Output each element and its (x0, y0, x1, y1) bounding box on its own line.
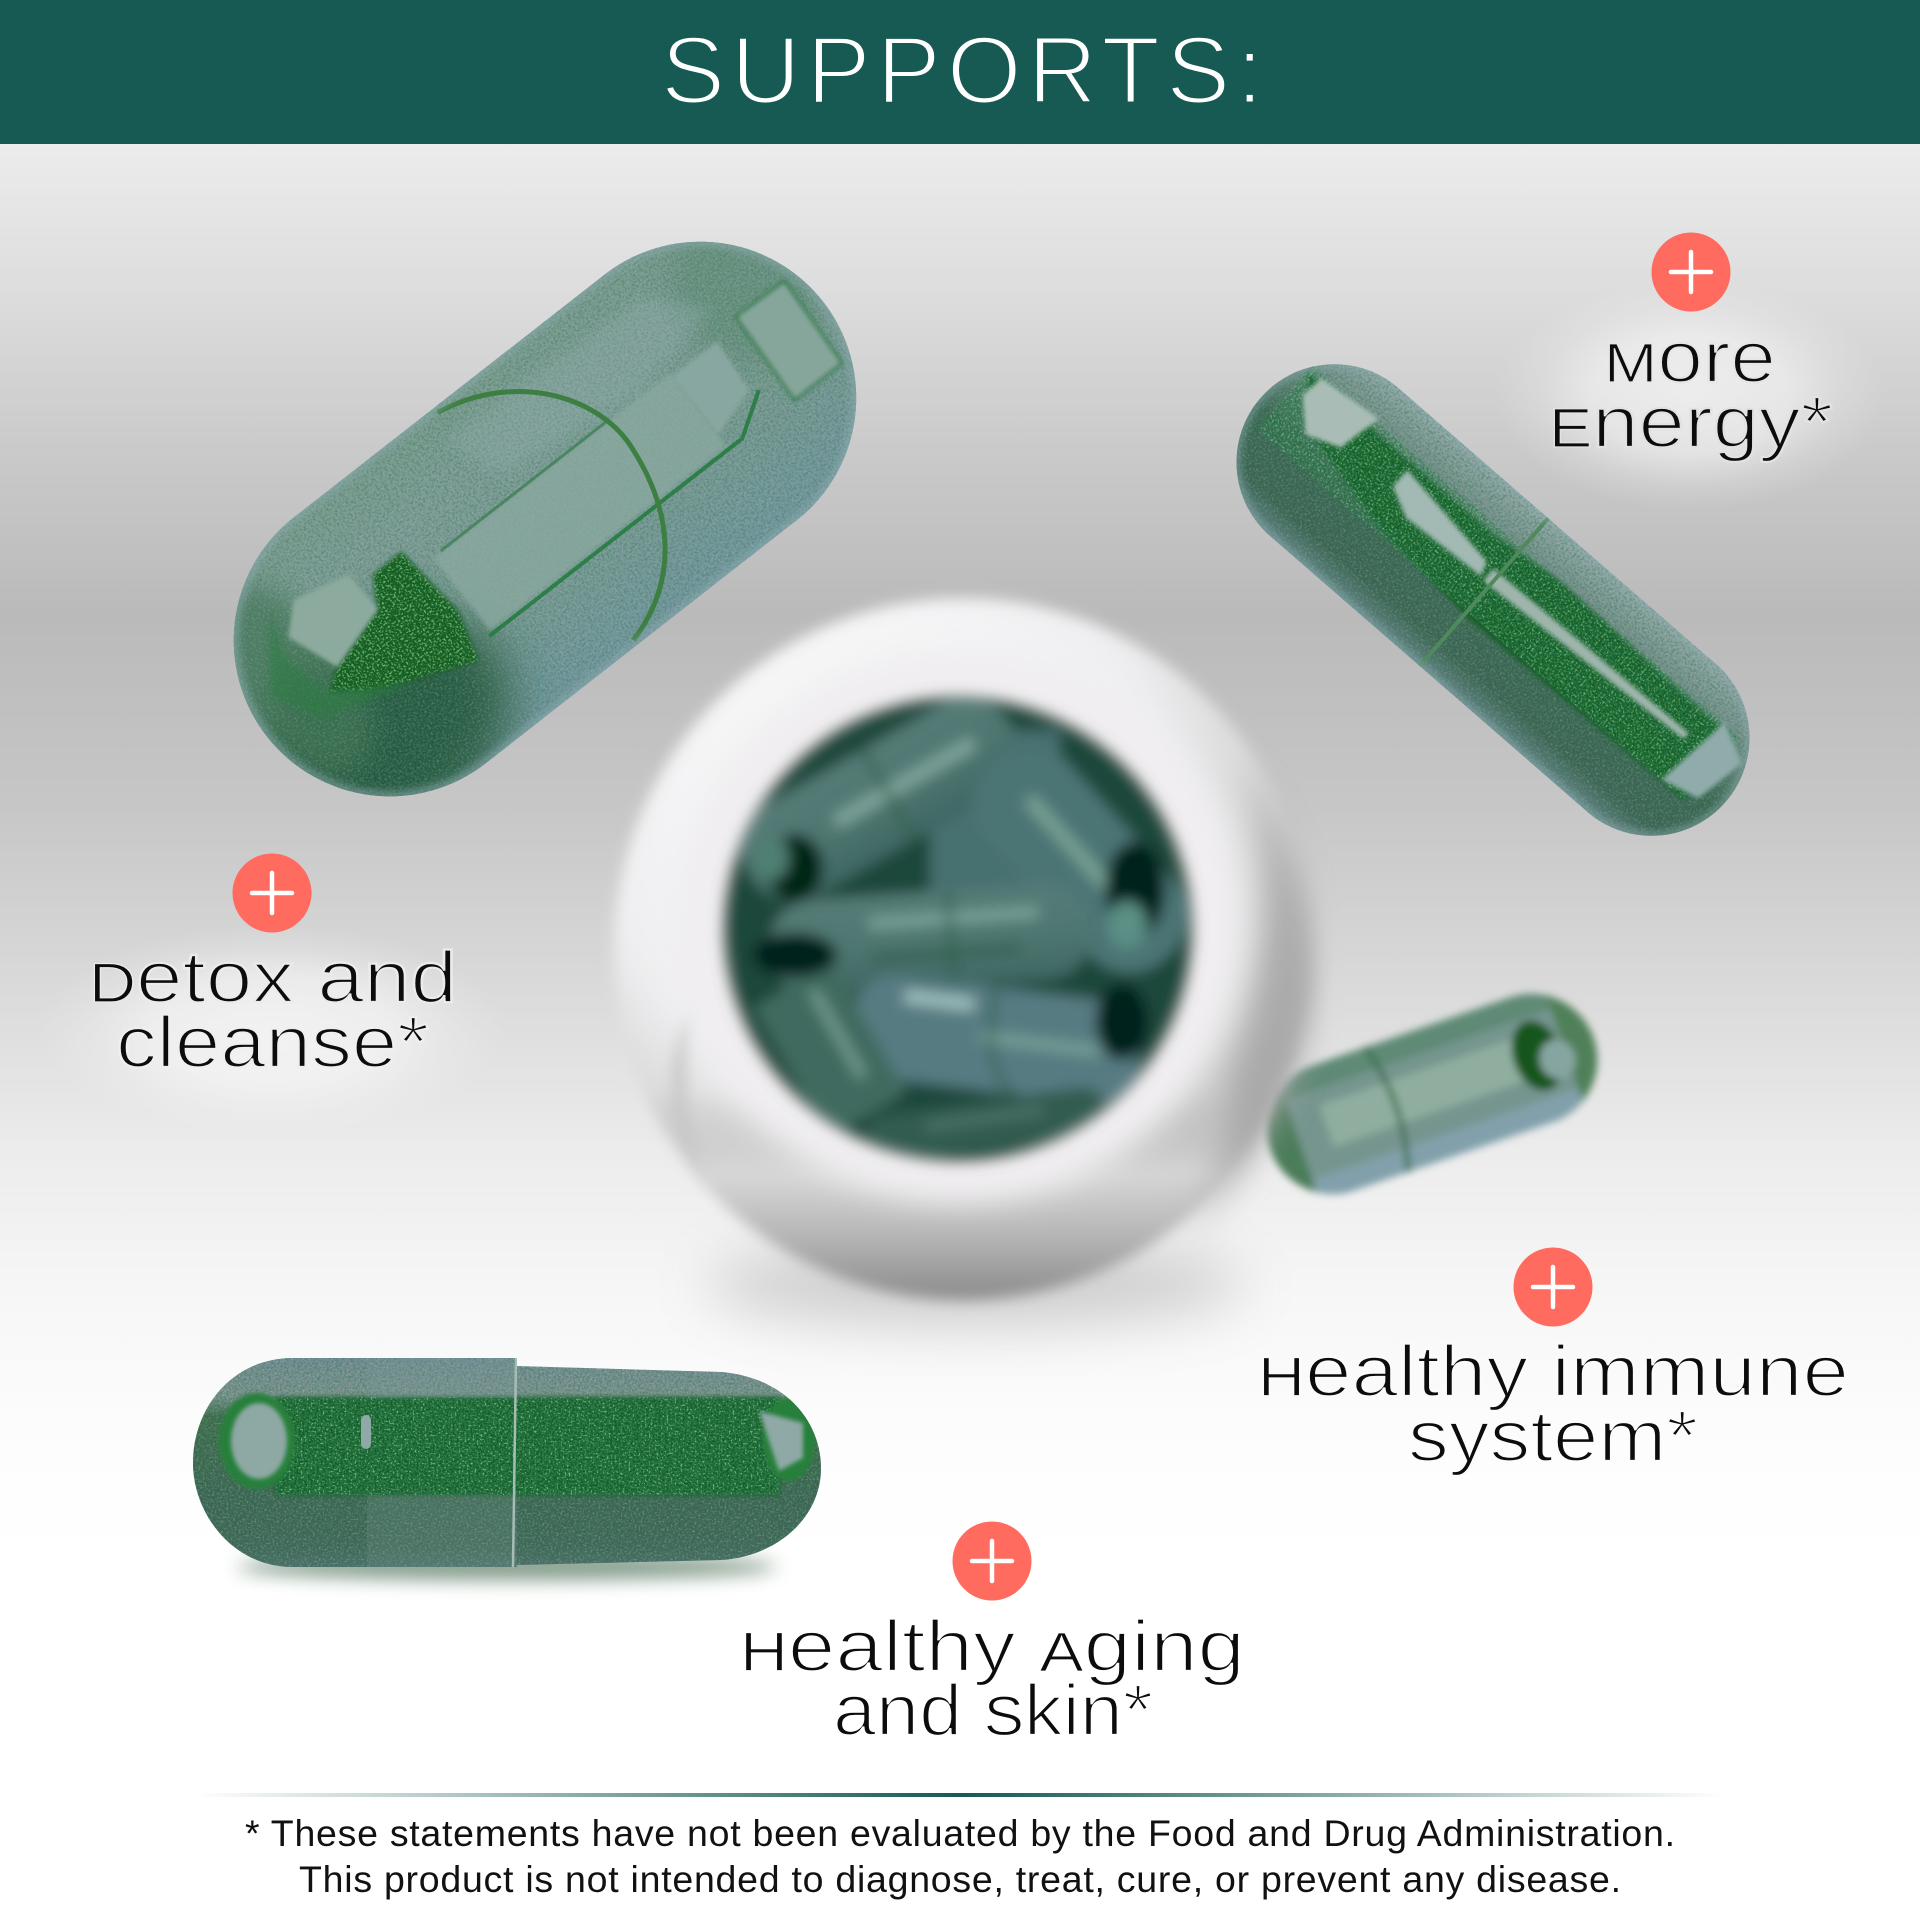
header banner (0, 0, 1920, 144)
plus icon (952, 1522, 1032, 1600)
divider rule (195, 1793, 1725, 1797)
label (1258, 1332, 1849, 1477)
benefit: more energy (1495, 232, 1885, 510)
label: More (1604, 318, 1776, 398)
label: cleanse* (116, 1003, 429, 1083)
plus icon (1652, 232, 1730, 312)
powder stripe (1304, 372, 1730, 802)
label (1549, 318, 1833, 463)
capsule highlight (286, 575, 380, 669)
benefit: healthy immune system (1258, 1248, 1849, 1477)
disclaimer text: * These statements have not been evaluated by the Food and Drug Administration. (245, 1812, 1675, 1854)
label: Healthy Aging (740, 1607, 1245, 1687)
benefit: detox and cleanse (37, 854, 507, 1135)
capsule: small blurred right (1262, 988, 1603, 1200)
light band (433, 373, 726, 631)
label (89, 938, 457, 1083)
bottle shadow (705, 1243, 1245, 1327)
capsule shadow (237, 1554, 777, 1580)
bottle opening with capsules (722, 680, 1209, 1165)
label: Detox and (89, 938, 457, 1018)
disclaimer text (245, 1812, 1675, 1900)
disclaimer text: This product is not intended to diagnose, treat, cure, or prevent any disease. (299, 1858, 1621, 1900)
label: system* (1408, 1397, 1698, 1477)
bottle lip (672, 647, 1244, 1203)
plus icon (1514, 1248, 1592, 1326)
bottle seen from above (614, 598, 1313, 1327)
powder band (275, 1397, 780, 1495)
label (740, 1607, 1245, 1751)
title: SUPPORTS: (661, 17, 1263, 124)
bottle body (614, 598, 1313, 1300)
label: Healthy immune (1258, 1332, 1849, 1412)
label: Energy* (1549, 383, 1833, 463)
label: and Skin* (833, 1671, 1153, 1751)
benefit: healthy aging and skin (740, 1522, 1245, 1751)
plus icon (232, 854, 312, 932)
capsule: large top left (234, 242, 856, 796)
capsule: top right (1236, 364, 1750, 836)
capsule: bottom left (193, 1358, 821, 1580)
powder patch (328, 549, 480, 694)
